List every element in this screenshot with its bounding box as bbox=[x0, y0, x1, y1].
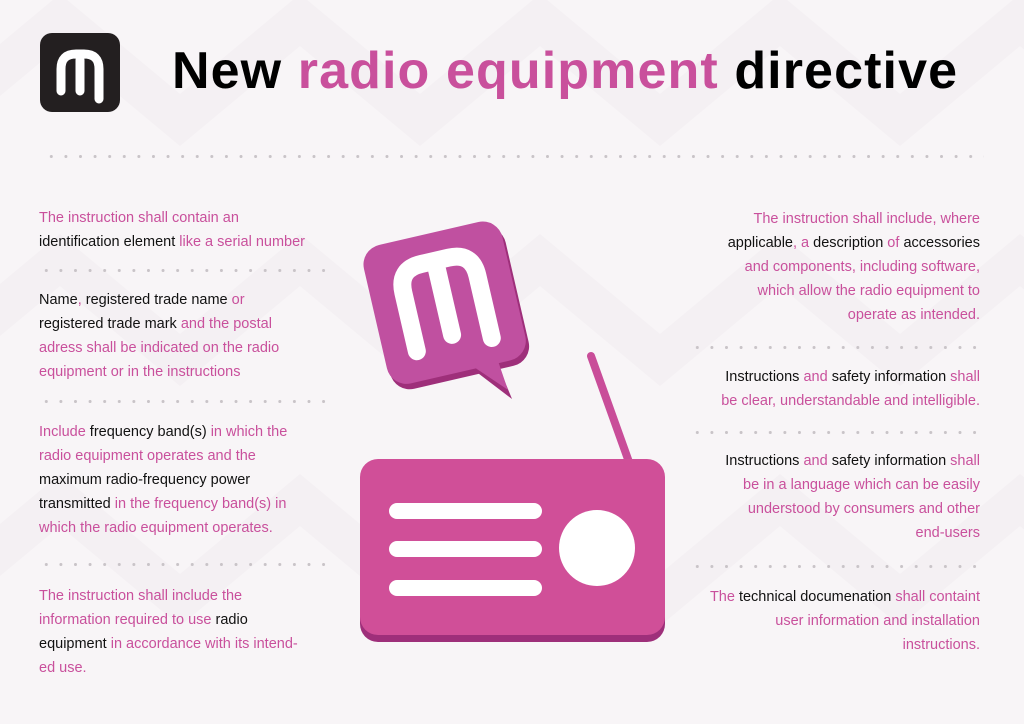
title: New radio equipment directive bbox=[172, 42, 958, 100]
right text 3: Instructions and safety information shall bbox=[725, 453, 980, 469]
icon: radio bbox=[360, 459, 665, 642]
right text 1: applicable, a description of accessories bbox=[728, 235, 980, 251]
left text 3: radio equipment operates and the bbox=[39, 448, 256, 464]
left text 3: Include frequency band(s) in which the bbox=[39, 424, 287, 440]
right text 3 bbox=[725, 453, 980, 541]
left text 3: transmitted in the frequency band(s) in bbox=[39, 496, 286, 512]
right text 1: and components, including software, bbox=[745, 259, 980, 275]
right text 1 bbox=[728, 211, 980, 323]
left text 2 bbox=[39, 292, 279, 380]
right text 3: understood by consumers and other bbox=[748, 501, 980, 517]
left text 2: adress shall be indicated on the radio bbox=[39, 340, 279, 356]
right text 1: which allow the radio equipment to bbox=[758, 283, 980, 299]
icon: antenna bbox=[591, 356, 629, 462]
left text 4 bbox=[39, 588, 298, 676]
left text 4: equipment in accordance with its intend- bbox=[39, 636, 298, 652]
right text 4: instructions. bbox=[903, 637, 980, 653]
left text 1: The instruction shall contain an bbox=[39, 210, 239, 226]
left text 2: Name, registered trade name or bbox=[39, 292, 245, 308]
logo bbox=[40, 33, 120, 112]
right text 3: end-users bbox=[916, 525, 980, 541]
left text 2: equipment or in the instructions bbox=[39, 364, 240, 380]
left text 1 bbox=[39, 210, 305, 250]
left text 2: registered trade mark and the postal bbox=[39, 316, 272, 332]
right text 2: Instructions and safety information shall bbox=[725, 369, 980, 385]
right text 2 bbox=[721, 369, 980, 409]
right text 4: The technical documenation shall containt bbox=[710, 589, 980, 605]
right text 2: be clear, understandable and intelligible. bbox=[721, 393, 980, 409]
right text 3: be in a language which can be easily bbox=[743, 477, 980, 493]
right text 4: user information and installation bbox=[775, 613, 980, 629]
left text 3: maximum radio-frequency power bbox=[39, 472, 250, 488]
right text 1: The instruction shall include, where bbox=[754, 211, 980, 227]
left text 1: identification element like a serial number bbox=[39, 234, 305, 250]
left text 4: information required to use radio bbox=[39, 612, 248, 628]
illustration: speech bubble and radio bbox=[360, 222, 665, 642]
right text 4 bbox=[710, 589, 980, 653]
icon: speech bubble bbox=[359, 217, 540, 425]
right text 1: operate as intended. bbox=[848, 307, 980, 323]
left text 4: The instruction shall include the bbox=[39, 588, 242, 604]
left text 4: ed use. bbox=[39, 660, 87, 676]
left text 3: which the radio equipment operates. bbox=[39, 520, 273, 536]
left text 3 bbox=[39, 424, 287, 536]
